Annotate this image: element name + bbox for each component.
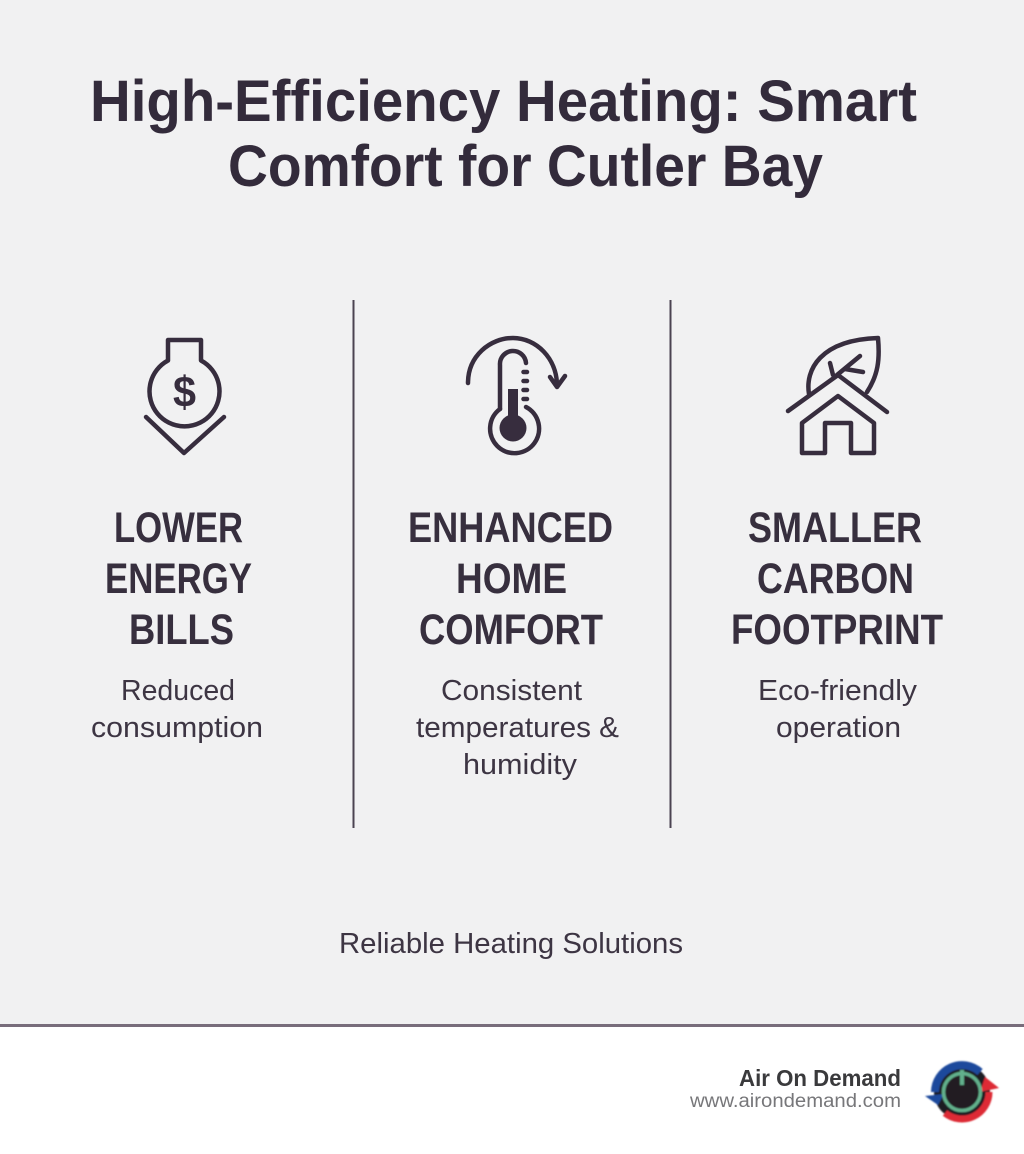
text: consistent temperatures and humidity: humidity: [463, 749, 578, 781]
footer brand text: www.airondemand.com: [689, 1091, 901, 1112]
heading: lower energy bills: ENERGY: [105, 555, 252, 603]
footer brand text: Air On Demand: [739, 1065, 901, 1091]
text: reduced consumption: consumption: [91, 712, 263, 744]
text: consistent temperatures and humidity: temperatures &: [416, 712, 619, 744]
title: Comfort for Cutler Bay: [228, 134, 823, 199]
heading: enhanced home comfort: ENHANCED: [408, 504, 613, 552]
icon: money bag with down arrow: $: [173, 368, 196, 417]
text: reduced consumption: [91, 675, 263, 744]
heading: lower energy bills: [105, 504, 252, 654]
heading: enhanced home comfort: HOME: [456, 555, 567, 603]
heading: smaller carbon footprint: SMALLER: [748, 504, 922, 552]
text: eco-friendly operation: [758, 675, 918, 744]
text: consistent temperatures and humidity: Consistent: [441, 675, 582, 707]
panel: smaller carbon footprint: [731, 338, 943, 744]
icon: money bag with down arrow: [146, 340, 224, 453]
title: High-Efficiency Heating: Smart: [90, 69, 917, 134]
text: eco-friendly operation: operation: [776, 712, 901, 744]
heading: lower energy bills: LOWER: [114, 504, 243, 552]
text: reduced consumption: Reduced: [121, 675, 235, 707]
heading: enhanced home comfort: COMFORT: [419, 606, 603, 654]
title: [90, 69, 917, 199]
icon: house with leaf: [788, 338, 887, 453]
heading: smaller carbon footprint: [731, 504, 943, 654]
logo: power symbol with arrows: [925, 1064, 999, 1120]
footer band: [0, 1024, 1024, 1154]
footer brand text: [689, 1065, 901, 1112]
heading: smaller carbon footprint: CARBON: [757, 555, 914, 603]
text: eco-friendly operation: Eco-friendly: [758, 675, 918, 707]
panel: enhanced home comfort: [408, 338, 619, 781]
heading: enhanced home comfort: [408, 504, 613, 654]
text: consistent temperatures and humidity: [416, 675, 619, 781]
heading: lower energy bills: BILLS: [129, 606, 234, 654]
icon: thermometer with arrow: [468, 338, 565, 453]
heading: smaller carbon footprint: FOOTPRINT: [731, 606, 943, 654]
tagline: Reliable Heating Solutions: [339, 928, 683, 960]
panel: lower energy bills: [91, 340, 263, 744]
